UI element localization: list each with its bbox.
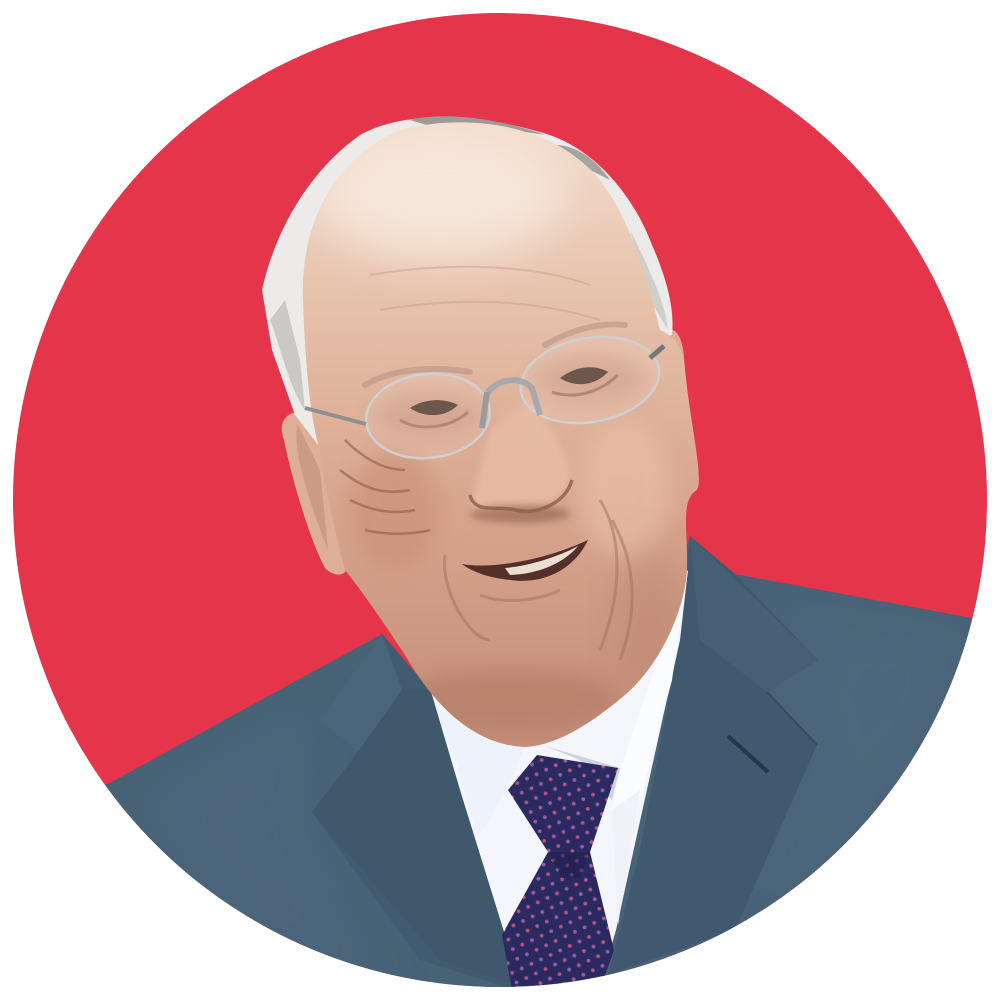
forehead wrinkles [370,267,600,320]
tie [502,755,618,990]
smile lines [444,500,632,660]
nose [470,408,570,510]
right lapel [608,536,818,975]
person [104,536,972,987]
glasses [305,326,666,464]
ears [282,329,699,575]
hair [262,116,673,450]
cheek tones [350,450,440,570]
eyes [410,400,458,415]
eye wrinkles [340,440,430,534]
left lapel [312,634,515,990]
shirt collar [430,570,688,985]
head and face [303,122,698,747]
eyebrows [365,369,470,385]
suit jacket [104,536,972,987]
mouth [462,540,588,581]
forehead highlight [315,130,565,260]
shade around eye sockets [375,393,485,437]
